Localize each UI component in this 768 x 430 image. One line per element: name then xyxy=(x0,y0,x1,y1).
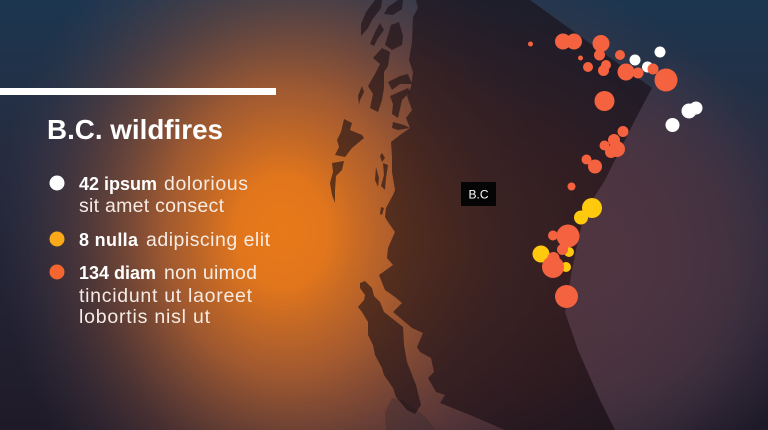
Haida Gwaii xyxy=(335,119,364,157)
map label: B.C xyxy=(461,182,496,206)
title: B.C. wildfires xyxy=(47,114,223,145)
map: British Columbia landmass xyxy=(330,0,652,430)
mainland xyxy=(379,0,652,430)
wildfire dots xyxy=(528,34,702,308)
legend item: white xyxy=(50,173,248,217)
legend item: orange: lobortis nisl ut xyxy=(79,306,211,328)
header bar xyxy=(0,88,276,95)
legend item: orange: tincidunt ut laoreet xyxy=(79,285,253,307)
coastal islands xyxy=(361,0,382,36)
legend item: orange: 134 diam xyxy=(79,263,156,283)
legend item: white: dolorious xyxy=(164,173,248,195)
Vancouver Island xyxy=(358,281,421,414)
dots: yellow xyxy=(532,198,602,272)
legend item: yellow: adipiscing elit xyxy=(146,229,271,251)
legend item: white: sit amet consect xyxy=(79,195,225,217)
map: neighbouring land to the south xyxy=(385,398,436,430)
map label: B.C: B.C xyxy=(468,188,489,202)
legend item: orange: non uimod xyxy=(164,262,257,284)
legend item: white: 42 ipsum xyxy=(79,174,157,194)
dots: white xyxy=(630,46,702,132)
legend xyxy=(50,173,271,328)
legend item: orange xyxy=(50,262,257,328)
map: neighbouring land to the east xyxy=(565,0,768,430)
legend item: yellow: 8 nulla xyxy=(79,230,139,250)
dots: red xyxy=(528,34,678,308)
legend item: yellow xyxy=(50,229,271,251)
